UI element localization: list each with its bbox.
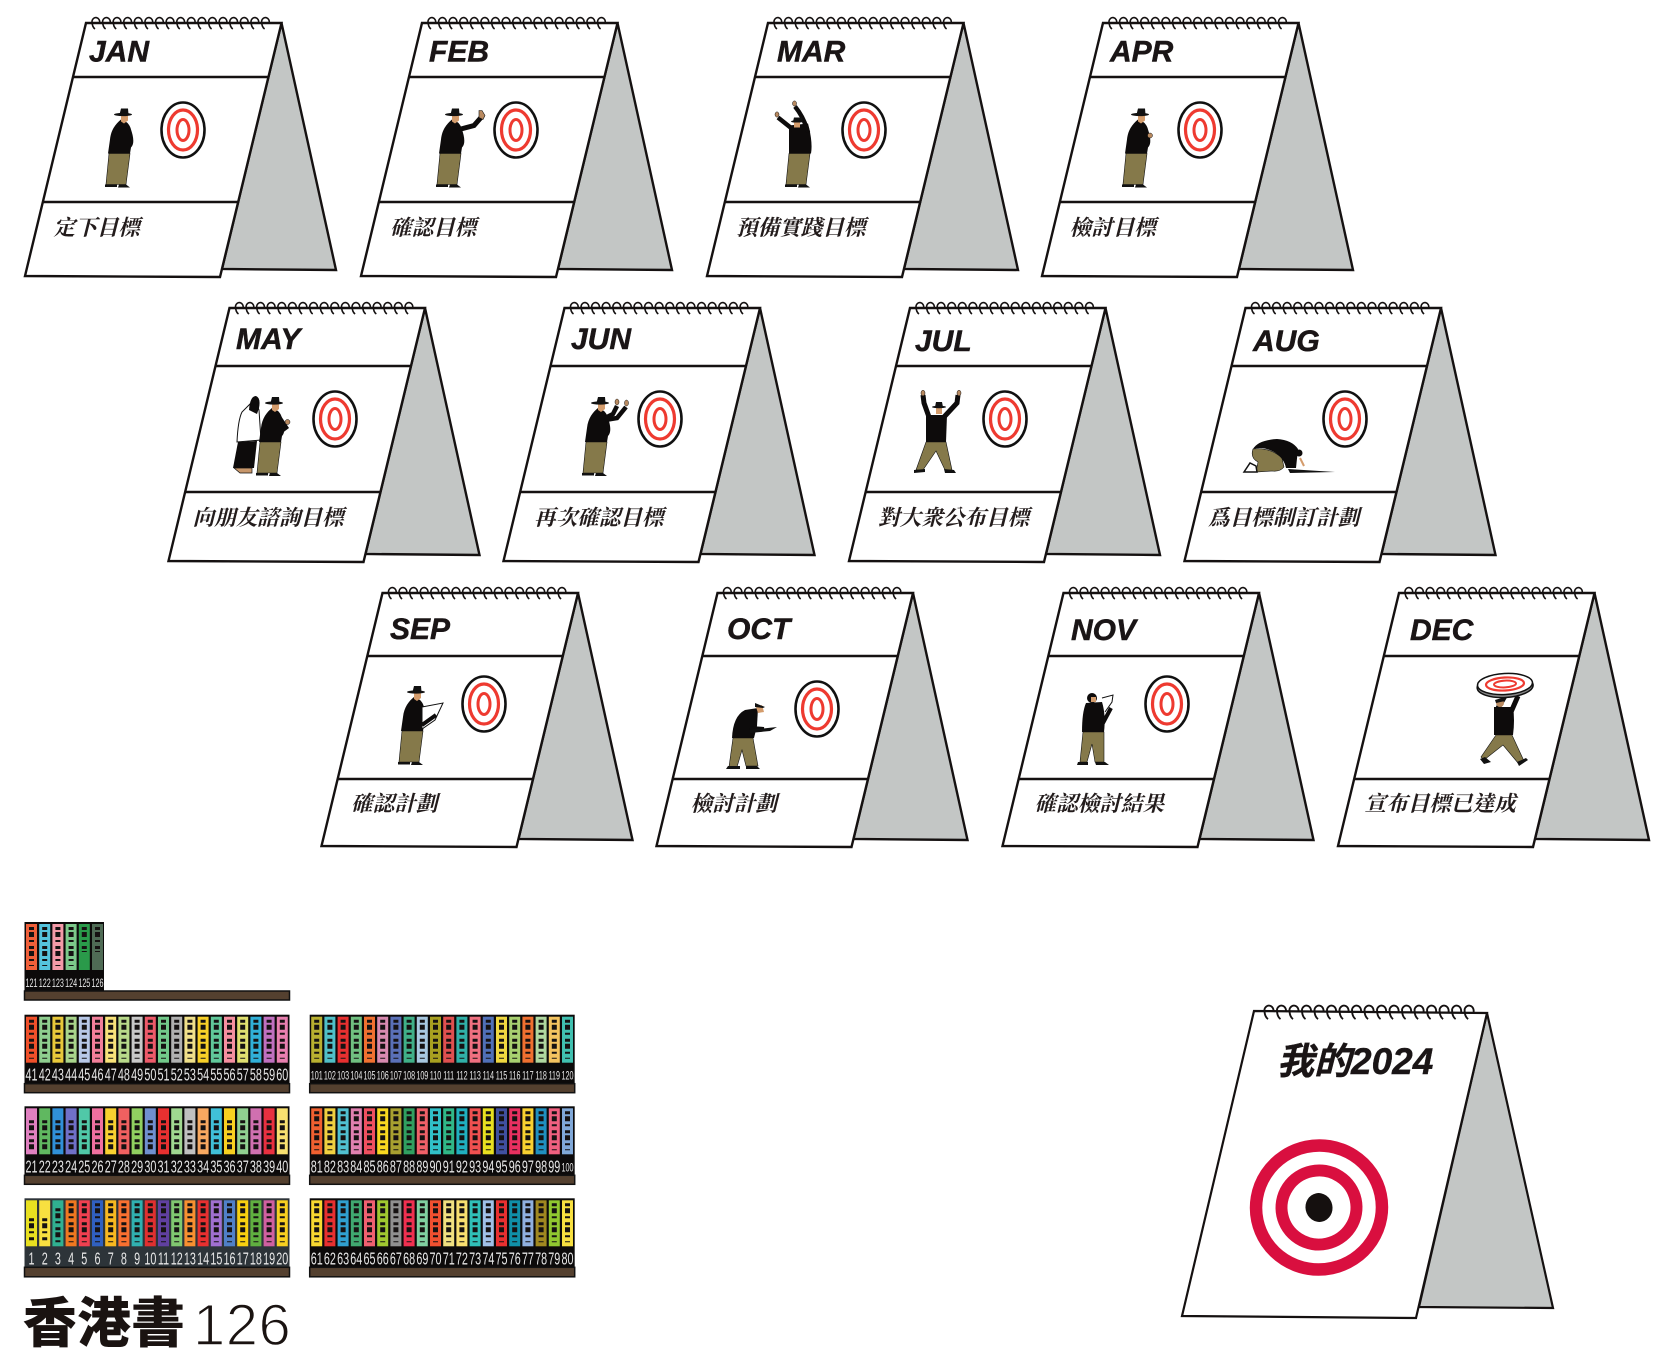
calendar: MAY [168,303,480,562]
bookshelf: 101-120: 108 [403,1070,415,1083]
bookshelf: 61-80: 74 [482,1250,494,1269]
bookshelf: 61-80: 65 [364,1250,376,1269]
bookshelf: 101-120: 120 [562,1070,574,1083]
bookshelf: 81-100: 93 [469,1158,481,1177]
bookshelf: 41-60: 45 [78,1066,90,1086]
bookshelf: 1-20: 9 [134,1250,140,1269]
front page [1182,1011,1487,1318]
bookshelf: 101-120: 112 [456,1070,468,1083]
bookshelf: 81-100 [310,1106,575,1184]
bookshelf: 1-20: 16 [224,1250,236,1269]
bookshelf: 41-60: 50 [144,1066,156,1086]
month label: AUG [1252,325,1320,358]
bookshelf: 81-100: 87 [390,1158,402,1177]
bookshelf: 41-60: 49 [131,1066,143,1086]
bookshelf: 81-100: 95 [496,1158,508,1177]
bookshelf: 61-80: 77 [522,1250,534,1269]
bookshelf: 21-40: 31 [158,1158,170,1177]
figure pointing [436,108,485,188]
bookshelf: 1-20: 8 [121,1250,127,1269]
bookshelf: top partial row 121-126 [24,922,290,1000]
bookshelf: 41-60: 58 [250,1066,262,1086]
bookshelf: 81-100: 91 [443,1158,455,1177]
bookshelf: 41-60: 42 [39,1066,51,1086]
figure holding plan [398,686,443,765]
bookshelf: top partial row 121-126: 121 [26,977,38,991]
caption: 爲目標制訂計劃 [1208,506,1364,530]
bookshelf: 81-100: 92 [456,1158,468,1177]
series name: 香港書 [23,1294,185,1354]
bookshelf: 21-40: 30 [144,1158,156,1177]
month label: NOV [1071,614,1139,647]
bookshelf: 21-40: 36 [224,1158,236,1177]
bookshelf: 61-80: 68 [403,1250,415,1269]
bookshelf: 1-20: 14 [197,1250,209,1269]
bookshelf: 21-40: 37 [237,1158,249,1177]
calendar: JAN [25,18,336,277]
bookshelf: 101-120: 105 [364,1070,376,1083]
figure woman [237,404,261,442]
calendar: NOV [1002,588,1314,847]
bookshelf: 81-100: 86 [377,1158,389,1177]
calendar: APR [1042,18,1353,277]
calendar: MAR [707,18,1018,277]
target [1178,102,1222,158]
woman hair [249,396,260,414]
bookshelf: 21-40: 29 [131,1158,143,1177]
bookshelf: 1-20: 5 [81,1250,87,1269]
target [842,102,886,158]
month label: DEC [1410,614,1475,647]
bookshelf: 101-120: 111 [443,1070,455,1083]
series title [23,1293,291,1358]
bookshelf: 41-60: 60 [276,1066,288,1086]
bookshelf: 61-80: 69 [416,1250,428,1269]
calendar: DEC [1338,588,1649,847]
bookshelf: 101-120: 116 [509,1070,521,1083]
bookshelf: 81-100: 84 [350,1158,362,1177]
bookshelf: 1-20: 17 [237,1250,249,1269]
target [796,682,838,736]
bookshelf: 61-80: 70 [430,1250,442,1269]
bookshelf: 21-40: 40 [276,1158,288,1177]
bookshelf: top partial row 121-126: 125 [78,977,91,991]
heading: 我的2024 [1277,1041,1433,1082]
woman feet [234,468,252,473]
bookshelf: 81-100: 85 [364,1158,376,1177]
caption: 向朋友諮詢目標 [192,506,348,530]
bookshelf: 81-100: 81 [311,1158,323,1177]
figure man [256,397,290,476]
bookshelf: 41-60 [24,1015,290,1093]
caption: 確認檢討結果 [1034,792,1165,816]
bookshelf: 21-40: 26 [92,1158,104,1177]
bookshelf: 81-100: 89 [416,1158,428,1177]
target [1146,676,1188,732]
woman skirt [233,441,257,468]
bookshelf: 41-60: 56 [224,1066,236,1086]
bookshelf: 21-40: 35 [210,1158,222,1177]
target [162,102,204,158]
bookshelf: 61-80 [310,1198,575,1277]
bookshelf: 61-80: 80 [562,1250,574,1269]
figure standing [105,108,133,188]
bookshelf: 1-20: 11 [158,1250,169,1269]
caption: 宣布目標已達成 [1364,792,1519,816]
bookshelf: 1-20: 12 [171,1250,183,1269]
calendar: OCT [656,588,968,847]
calendar: JUN [504,303,814,562]
bookshelf: 81-100: 90 [430,1158,442,1177]
bookshelf: 81-100: 83 [337,1158,349,1177]
bookshelf: 101-120: 107 [390,1070,402,1083]
figure with checklist [1077,693,1113,765]
caption: 對大衆公布目標 [878,506,1034,530]
bookshelf: 61-80: 78 [535,1250,547,1269]
figure both arms up [914,390,961,473]
bookshelf: 81-100: 88 [403,1158,415,1177]
bookshelf: 41-60: 47 [105,1066,117,1086]
bookshelf: 61-80: 73 [469,1250,481,1269]
target [638,392,682,446]
month label: JUL [915,325,972,358]
bookshelf: 21-40: 23 [52,1158,64,1177]
bookshelf: 41-60: 48 [118,1066,130,1086]
bookshelf: 81-100: 100 [562,1162,574,1175]
bookshelf: 41-60: 53 [184,1066,196,1086]
bookshelf: 41-60: 51 [158,1066,170,1086]
bookshelf: 81-100: 96 [509,1158,521,1177]
bookshelf: 21-40: 25 [78,1158,90,1177]
bookshelf: 101-120 [310,1015,575,1093]
bookshelf: 1-20: 10 [144,1250,156,1269]
bookshelf: 21-40: 28 [118,1158,130,1177]
spiral binding [1264,1006,1474,1019]
target [462,676,506,732]
calendar: JUL [849,303,1160,562]
bookshelf: 101-120: 101 [311,1070,323,1083]
bookshelf: 61-80: 66 [377,1250,389,1269]
target [494,102,538,158]
target [1324,392,1366,446]
target [984,392,1026,446]
back stand [1419,1013,1553,1308]
bookshelf: 61-80: 64 [350,1250,362,1269]
bookshelf: 41-60: 44 [65,1066,77,1086]
bookshelf: 101-120: 118 [535,1070,547,1083]
bookshelf: 21-40: 32 [171,1158,183,1177]
month label: SEP [390,613,451,646]
bookshelf: 101-120: 103 [337,1070,349,1083]
bookshelf: 101-120: 119 [549,1070,560,1083]
bookshelf: 41-60: 59 [263,1066,275,1086]
bookshelf: 61-80: 79 [548,1250,560,1269]
calendar: FEB [361,18,672,277]
month label: JUN [571,323,632,356]
bookshelf: 101-120: 115 [496,1070,508,1083]
large target [1244,1134,1394,1281]
bookshelf: 21-40: 33 [184,1158,196,1177]
bookshelf: 21-40 [24,1106,290,1184]
bookshelf: 1-20: 7 [108,1250,114,1269]
bookshelf: 21-40: 22 [39,1158,51,1177]
month label: MAY [236,323,303,356]
figure bent over writing [726,703,777,769]
bookshelf: 61-80: 61 [311,1250,323,1269]
month label: OCT [727,613,793,646]
bookshelf: 101-120: 102 [324,1070,336,1083]
bookshelf: 1-20: 6 [95,1250,101,1269]
target [314,392,356,446]
bookshelf: 1-20: 15 [210,1250,222,1269]
bookshelf: 61-80: 71 [443,1250,455,1269]
bookshelf: top partial row 121-126: 122 [39,977,51,991]
bookshelf: 1-20: 1 [29,1250,35,1269]
series number: 126 [193,1293,291,1358]
bookshelf: 101-120: 104 [350,1070,363,1083]
bookshelf: 101-120: 113 [469,1070,481,1083]
caption: 檢討目標 [1070,216,1160,240]
bookshelf: top partial row 121-126: 126 [92,977,104,991]
bookshelf: 101-120: 110 [430,1070,442,1083]
calendar: 我的2024 [1182,1006,1553,1318]
bookshelf: 81-100: 97 [522,1158,534,1177]
bookshelf: 61-80: 75 [496,1250,508,1269]
bookshelf: 1-20: 18 [250,1250,262,1269]
bookshelf: 41-60: 43 [52,1066,64,1086]
bookshelf: 101-120: 109 [416,1070,429,1083]
bookshelf: 21-40: 34 [197,1158,209,1177]
caption: 再次確認目標 [534,506,668,530]
target disc on shoulder [1476,672,1534,699]
bookshelf: 41-60: 54 [197,1066,209,1086]
month label: MAR [777,36,846,68]
bookshelf: 21-40: 38 [250,1158,262,1177]
caption: 確認目標 [390,216,481,240]
month label: JAN [89,36,150,68]
figure two arms pointing [582,397,628,476]
figure kneeling and writing [1244,439,1335,473]
bookshelf: 81-100: 99 [548,1158,560,1177]
calendar: AUG [1184,303,1496,562]
bookshelf: 1-20: 13 [184,1250,196,1269]
bookshelf: 41-60: 57 [237,1066,249,1086]
bookshelf: top partial row 121-126: 124 [65,977,77,991]
caption: 檢討計劃 [690,792,781,816]
bookshelf: 21-40: 39 [263,1158,275,1177]
bookshelf: 21-40: 24 [65,1158,77,1177]
bookshelf: 1-20: 3 [55,1250,61,1269]
bookshelf: 61-80: 62 [324,1250,336,1269]
bookshelf: 1-20 [24,1198,290,1277]
bookshelf: 21-40: 21 [26,1158,38,1177]
figure arms crossed [1122,108,1152,188]
bookshelf: 41-60: 46 [92,1066,104,1086]
bookshelf: 1-20: 2 [42,1250,48,1269]
bookshelf: 1-20: 4 [68,1250,74,1269]
bookshelf: top partial row 121-126: 123 [52,977,64,991]
bookshelf: 61-80: 67 [390,1250,402,1269]
bookshelf: 61-80: 63 [337,1250,349,1269]
caption: 確認計劃 [351,792,442,816]
bookshelf: 81-100: 82 [324,1158,336,1177]
bookshelf: 61-80: 72 [456,1250,468,1269]
bookshelf: 101-120: 117 [522,1070,534,1083]
calendar: SEP [322,588,632,847]
caption: 定下目標 [54,216,144,240]
bookshelf: 81-100: 98 [535,1158,547,1177]
month label: APR [1109,36,1174,68]
bookshelf: 101-120: 106 [377,1070,389,1083]
bookshelf: 1-20: 20 [276,1250,288,1269]
bookshelf: 21-40: 27 [105,1158,117,1177]
bookshelf: 41-60: 41 [26,1066,38,1086]
figure carrying target [1480,696,1528,766]
bookshelf: 41-60: 55 [210,1066,222,1086]
bookshelf: 41-60: 52 [171,1066,183,1086]
bookshelf: 81-100: 94 [482,1158,494,1177]
month label: FEB [429,36,489,68]
bookshelf: 1-20: 19 [263,1250,275,1269]
bookshelf: 101-120: 114 [483,1070,494,1083]
caption: 預備實踐目標 [736,216,870,240]
bookshelf: 61-80: 76 [509,1250,521,1269]
figure arms raised [775,101,812,188]
